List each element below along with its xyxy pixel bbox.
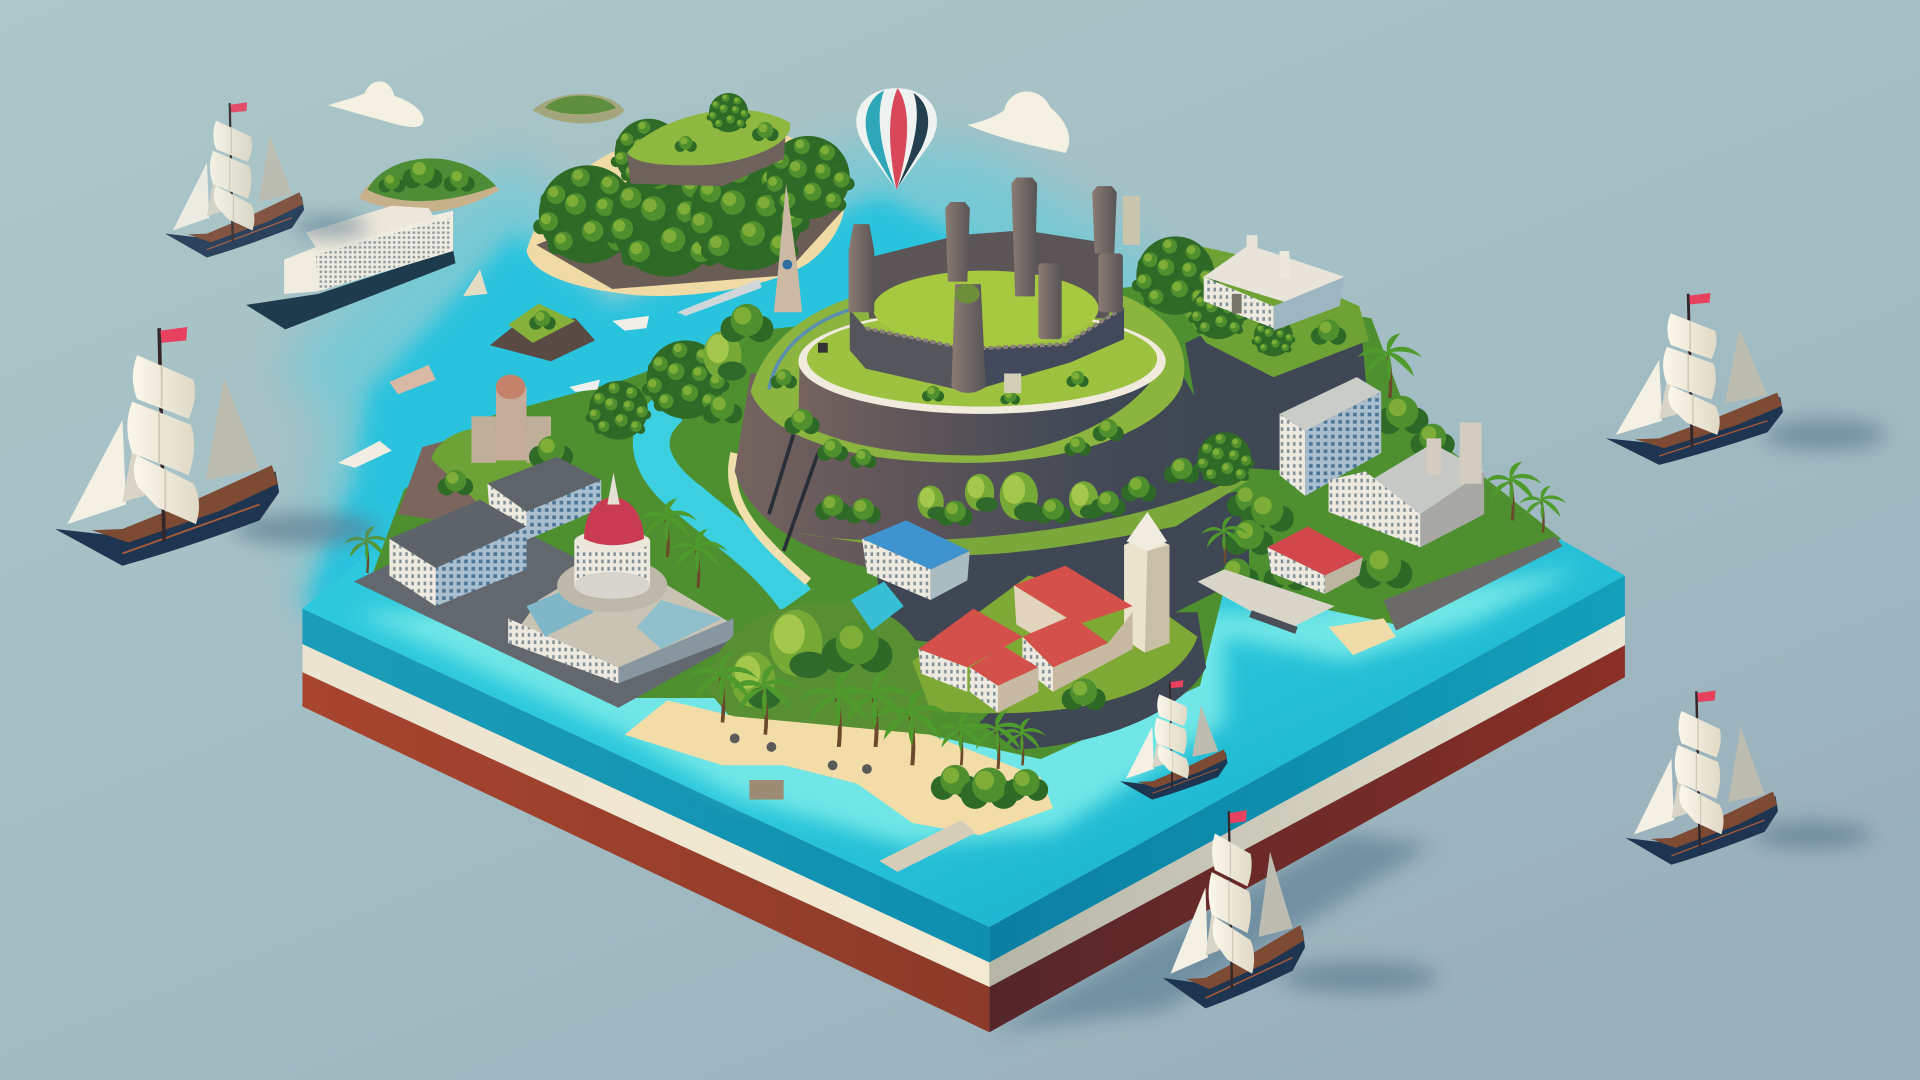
lower terrace tree row [815, 432, 1271, 526]
beach visitors and rocks [730, 733, 872, 800]
front tower [951, 284, 986, 393]
shallow water surrounding the back of the island [282, 147, 1224, 637]
blue roof temple [851, 520, 970, 631]
dark cliff fissures [769, 435, 818, 551]
cloud left [328, 81, 424, 127]
ship: on the water [1120, 680, 1227, 800]
hot air balloon [856, 88, 937, 190]
middle terrace grass ring [751, 288, 1184, 463]
back fortress wall [861, 230, 1120, 318]
stone hall with grey roof [1329, 422, 1484, 547]
palm islet [931, 710, 1048, 809]
back island [527, 93, 855, 296]
back right cliff and garden [1123, 196, 1369, 471]
upper ring wall [798, 361, 1163, 456]
cloud right [967, 92, 1069, 153]
cruise ship [246, 206, 456, 329]
wall battlements [866, 307, 1124, 349]
platform right face: cream layer [989, 616, 1625, 987]
inner tower [1038, 263, 1062, 339]
small island top [533, 94, 624, 123]
platform top: sea surface [302, 367, 1625, 927]
front right fortress wall [967, 307, 1124, 392]
hotel front [389, 500, 527, 606]
tan hotel back [487, 457, 601, 540]
sandy river bank [732, 453, 808, 582]
church on the left hill [398, 375, 551, 524]
mossy front tower cap [955, 284, 980, 304]
beach palm trees [687, 652, 950, 765]
lower terrace grass [796, 480, 1249, 555]
river path on the terrace [769, 306, 863, 389]
small rocky islet [490, 304, 595, 361]
capitol building [508, 473, 733, 683]
stepped fortress hill [735, 178, 1271, 651]
right forest [1201, 333, 1566, 590]
platform right face: red layer [989, 645, 1625, 1032]
red complex grounds [912, 576, 1206, 749]
left tower [849, 224, 874, 312]
ship: top left [165, 102, 304, 258]
middle terrace shrubs [770, 369, 1124, 468]
upper terrace rocks and shrubs [818, 343, 1089, 405]
back tower left [945, 202, 970, 282]
middle cliff wall [735, 373, 1237, 569]
layered platform [302, 367, 1625, 1032]
main island base [367, 282, 1561, 759]
sandy beach [624, 700, 1053, 835]
red roof complex [918, 566, 1133, 713]
ship: large left [55, 327, 279, 566]
clock tower [1124, 512, 1169, 653]
inner courtyard [873, 271, 1098, 347]
wooden pier [879, 820, 976, 872]
lower island land [367, 282, 1561, 759]
harbour quay with docks [1198, 536, 1562, 655]
river over land [651, 407, 796, 600]
shadows of ships on ground [233, 217, 1886, 993]
platform ground shadow [989, 833, 1433, 1032]
platform left face: cream layer [302, 644, 989, 987]
back tower right [1092, 186, 1117, 253]
front left fortress wall [850, 310, 967, 392]
back tower centre [1011, 178, 1037, 296]
lower cliff wall [876, 490, 1249, 651]
ship: right upper [1606, 293, 1783, 465]
grey city pad [354, 514, 740, 708]
platform right face: sea layer [989, 576, 1625, 962]
green islet upper left [359, 158, 500, 212]
upper terrace grass with pale rim [798, 309, 1166, 414]
stone spire [774, 184, 802, 312]
green trees between church and fortress [529, 304, 773, 468]
palm trees on the left shore [344, 498, 727, 588]
small red roof building [1267, 527, 1363, 594]
white mansion [1204, 235, 1344, 331]
ship: right lower [1626, 691, 1778, 865]
ship: front of platform [1163, 810, 1305, 1008]
pale shallows along the shores [355, 569, 1580, 845]
platform left face: sea layer [302, 609, 989, 962]
white blue hotel [1280, 377, 1381, 496]
small boats in the bay [338, 269, 762, 468]
right tower [1098, 253, 1123, 312]
platform left face: red layer [302, 672, 989, 1032]
green hill and palm grove [704, 603, 932, 759]
